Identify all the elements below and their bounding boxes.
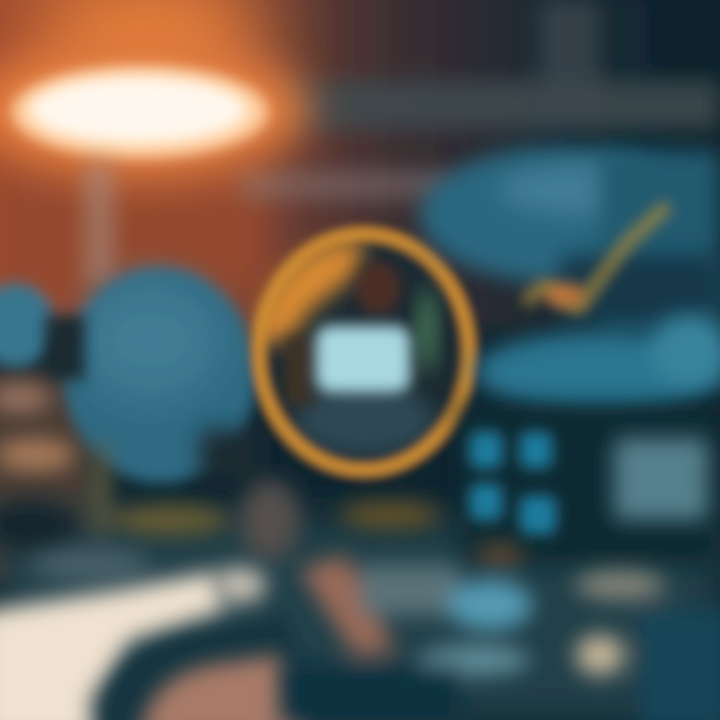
lamp glow [0, 0, 310, 180]
lamp stand [84, 160, 114, 285]
left machine body [0, 267, 260, 551]
white table surface [0, 572, 225, 720]
lower centre dim glow [30, 440, 440, 581]
keypad buttons [470, 432, 556, 534]
ceiling beams [240, 0, 720, 200]
screen panel [614, 438, 708, 520]
lower centre clutter [214, 543, 720, 720]
right machine body [420, 147, 720, 565]
check mark [525, 205, 668, 308]
centre ring [255, 234, 473, 470]
chair back [105, 615, 330, 720]
check mark highlight [545, 284, 585, 306]
